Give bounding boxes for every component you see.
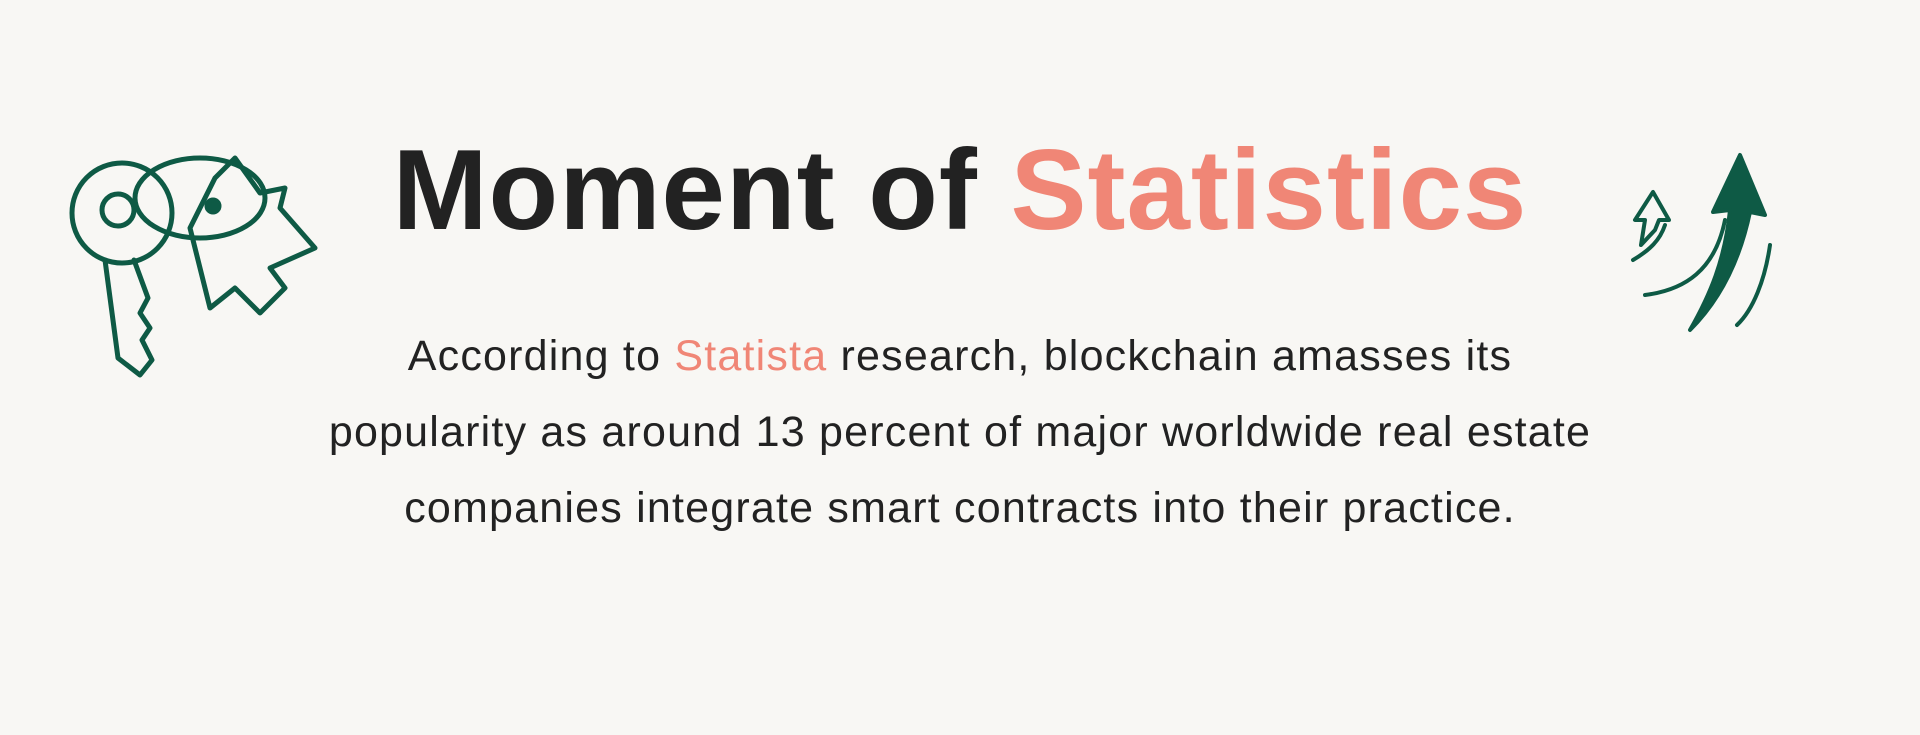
big arrow [1645, 155, 1770, 330]
title: Moment of Statistics [393, 127, 1527, 254]
body text [329, 332, 1591, 532]
icon: key and house tag [70, 156, 318, 378]
body text: According to Statista research, blockchain amasses its [408, 332, 1512, 380]
key [72, 163, 172, 375]
body text: companies integrate smart contracts into their practice. [404, 484, 1516, 532]
icon: growth arrows [1630, 152, 1772, 332]
body text: popularity as around 13 percent of major worldwide real estate [329, 408, 1591, 456]
ring [135, 158, 265, 238]
small arrow [1633, 192, 1669, 260]
house tag [190, 158, 315, 313]
